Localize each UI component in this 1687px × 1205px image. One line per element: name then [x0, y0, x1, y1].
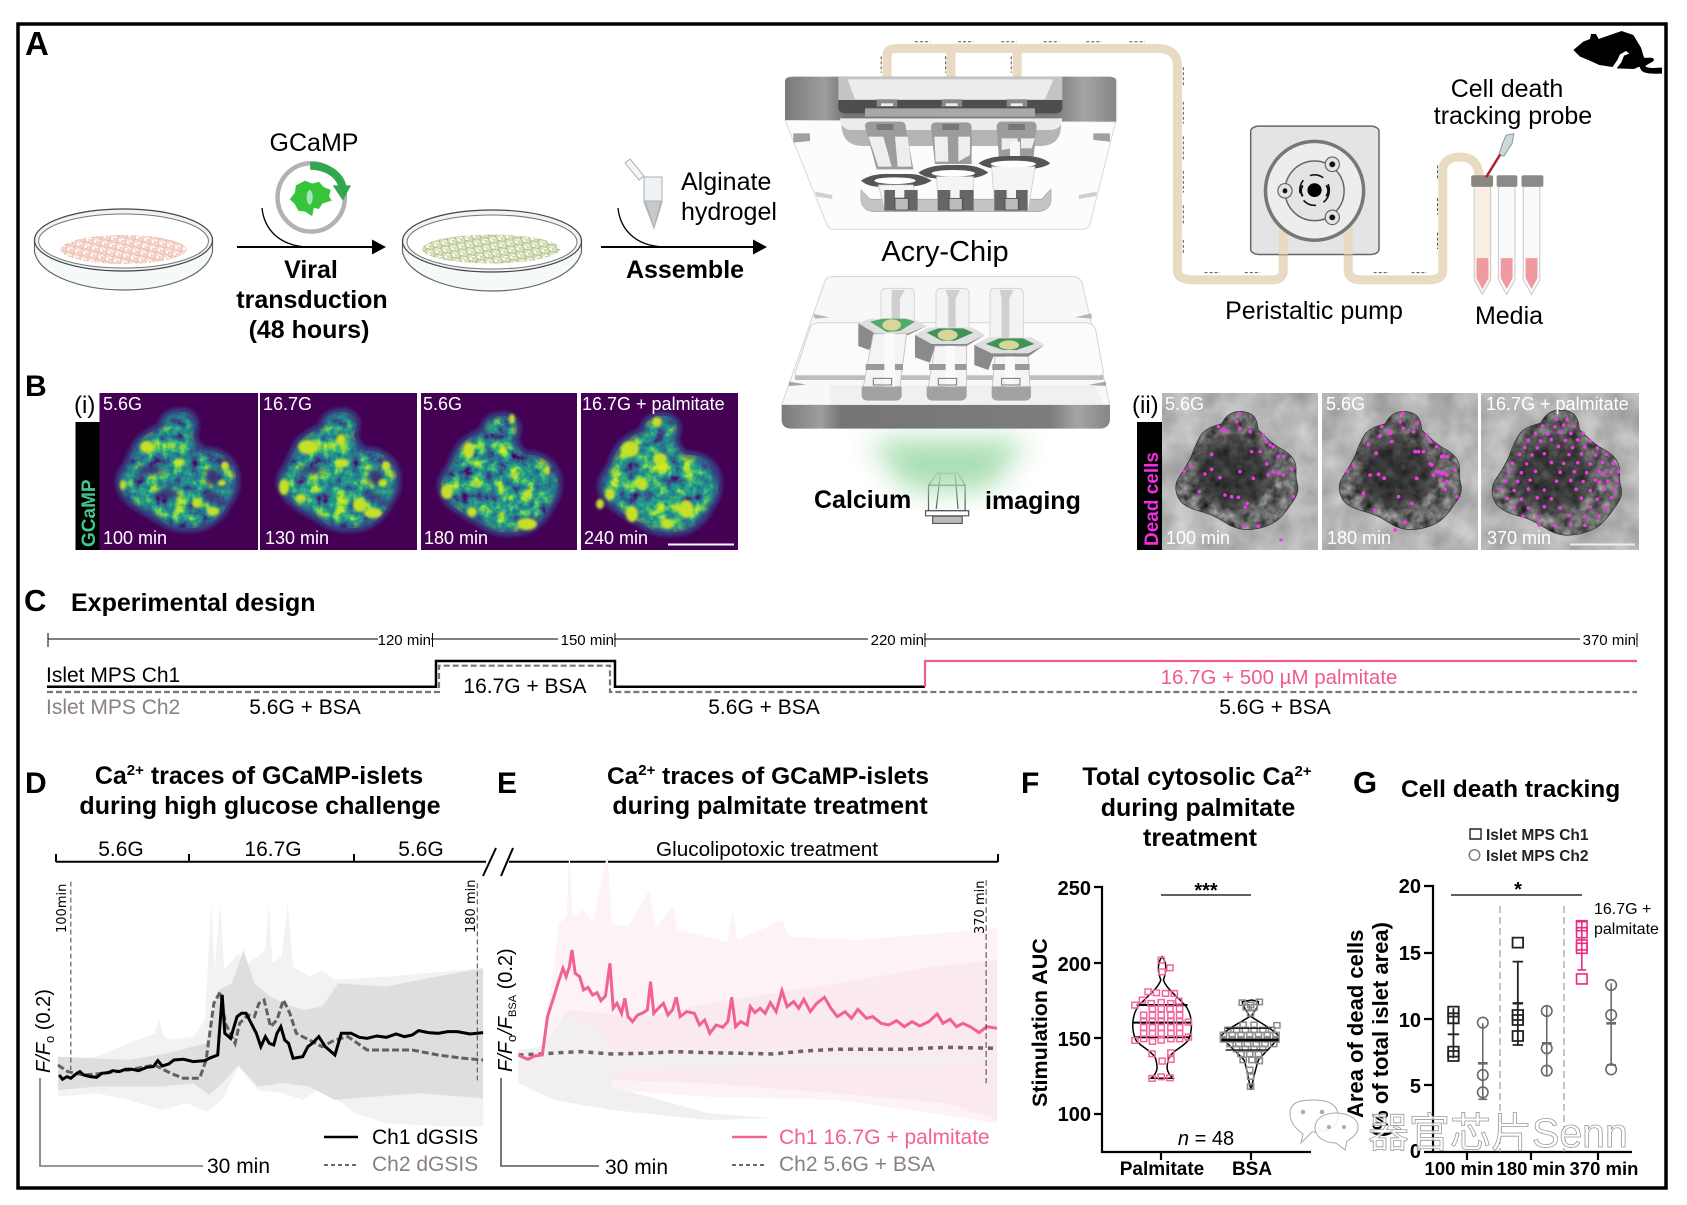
image: 5.6G 180 min: 5.6G — [1326, 394, 1365, 414]
panel: B(ii) dead cell images — [1132, 392, 1639, 550]
flow direction marks — [881, 42, 1438, 273]
panel: B(i) GCaMP images — [25, 370, 738, 550]
legend E: Ch2 5.6G + BSA — [779, 1153, 935, 1176]
label: Acry-Chip: Acry-Chip — [881, 236, 1009, 268]
label: (i): (i) — [74, 392, 95, 419]
chart D traces — [58, 882, 483, 1127]
axes: Palmitate — [1120, 1159, 1204, 1180]
step line: Ch1 — [47, 661, 925, 687]
annotation: 16.7G + palmitate: 16.7G + — [1594, 901, 1651, 918]
label: viral transduction: (48 hours) — [249, 316, 369, 344]
condition labels: 5.6G + BSA — [708, 696, 820, 719]
axes: 5 — [1410, 1076, 1421, 1098]
heading: panel F title: during palmitate — [1101, 794, 1295, 822]
heading: cell death tracking: Cell death tracking — [1401, 776, 1620, 803]
label strip: Dead cells — [1137, 422, 1163, 550]
timeline: 150 min — [561, 632, 614, 649]
diagram: bottom chip — [782, 277, 1110, 429]
timeline: 120 min — [378, 632, 431, 649]
axes: 200 — [1058, 954, 1091, 976]
timepoint labels: 100min — [55, 884, 70, 933]
y axis label line 2: (% of total islet area) — [1368, 922, 1393, 1137]
label: Islet MPS Ch2: Islet MPS Ch2 — [46, 696, 180, 719]
well: left — [858, 319, 927, 350]
heading: panel D title: during high glucose challenge — [79, 792, 441, 820]
panel letter E: E — [497, 767, 517, 800]
scale bar E — [501, 1078, 668, 1179]
heading: panel F title: 2+ — [1294, 763, 1312, 780]
violin: palmitate — [1132, 957, 1191, 1081]
y axis label: Stimulation AUC — [1028, 938, 1052, 1107]
axis label E: F/F — [495, 1040, 517, 1072]
chip top band — [785, 77, 1116, 122]
image: 5.6G 100 min — [100, 393, 258, 550]
heading: panel D title: traces of GCaMP-islets — [144, 762, 423, 790]
axis label D: F/F — [33, 1041, 55, 1073]
legend — [1469, 827, 1589, 865]
axes — [1399, 876, 1638, 1179]
scale bar E: 30 min — [605, 1156, 668, 1179]
axes: BSA — [1232, 1159, 1272, 1180]
image: 5.6G 180 min: 5.6G — [423, 394, 462, 414]
image: 5.6G 180 min — [1322, 393, 1478, 550]
sample size: n = 48 — [1178, 1128, 1234, 1150]
axis label E: BSA — [507, 994, 519, 1017]
panel: C experimental design — [24, 583, 1637, 719]
axes: 180 min — [1497, 1158, 1565, 1179]
scale bar D: 30 min — [207, 1155, 270, 1178]
panel: A workflow — [25, 25, 1662, 523]
condition labels: 16.7G + BSA — [463, 675, 587, 698]
heading: panel E title: 2+ — [638, 762, 656, 779]
label: Islet MPS Ch1: Islet MPS Ch1 — [46, 664, 180, 687]
label: imaging: imaging — [985, 487, 1081, 515]
condition labels: 5.6G + BSA — [249, 696, 361, 719]
violins — [1132, 957, 1280, 1090]
legend E — [732, 1126, 990, 1176]
image: 16.7G + palmitate 370 min — [1481, 393, 1639, 550]
condition bar: 5.6G — [398, 838, 444, 861]
step line: Ch1 palmitate — [925, 661, 1637, 687]
heading: panel D title: 2+ — [127, 762, 144, 779]
legend D: Ch2 dGSIS — [372, 1153, 478, 1176]
diagram: tubing, pump, media — [881, 42, 1543, 523]
axes: 15 — [1399, 943, 1421, 965]
axis label D: (0.2) — [33, 989, 55, 1036]
heading: panel F title: Total cytosolic Ca — [1082, 763, 1312, 791]
axes: 150 — [1058, 1029, 1091, 1051]
image: 16.7G + palmitate 240 min: 240 min — [584, 528, 648, 548]
axes: 100 min — [1425, 1158, 1493, 1179]
condition labels: 16.7G + 500 µM palmitate — [1161, 666, 1397, 689]
panel letter C: C — [24, 583, 46, 618]
panel letter D: D — [25, 767, 47, 800]
heading: panel E title: traces of GCaMP-islets — [655, 763, 929, 790]
icon: peristaltic pump — [1251, 126, 1379, 254]
axis label E: o — [504, 1035, 519, 1042]
icon: petri dish with transduced islets — [402, 210, 582, 291]
timeline: 220 min — [871, 632, 924, 649]
panel: D and E charts — [25, 762, 998, 1179]
label: (ii): (ii) — [1132, 392, 1159, 419]
channel top sections — [881, 288, 1023, 343]
significance — [1451, 879, 1582, 901]
image: 5.6G 100 min: 100 min — [103, 528, 167, 548]
image: 16.7G 130 min — [260, 393, 417, 550]
watermark — [1290, 1100, 1628, 1156]
well: middle — [915, 327, 985, 363]
image: 5.6G 100 min: 100 min — [1166, 528, 1230, 548]
tray — [793, 118, 1110, 212]
image: 5.6G 180 min: 180 min — [1327, 528, 1391, 548]
label: Peristaltic pump: Peristaltic pump — [1225, 297, 1403, 325]
icon: probe pipette — [1486, 134, 1514, 177]
panel letter G: G — [1353, 765, 1377, 800]
panel letter F: F — [1021, 767, 1039, 800]
label: GCaMP: GCaMP — [270, 129, 358, 157]
step line: Ch2 — [47, 666, 1637, 692]
chart E traces — [519, 847, 997, 1123]
image: 16.7G + palmitate 240 min: 16.7G + palmitate — [582, 394, 725, 414]
heading: experimental design: Experimental design — [71, 589, 316, 617]
significance — [1161, 880, 1251, 902]
timeline — [48, 632, 1637, 649]
axis label E: (0.2) — [495, 948, 517, 995]
image: 5.6G 100 min: 5.6G — [1165, 394, 1204, 414]
image: 16.7G + palmitate 370 min: 370 min — [1487, 528, 1551, 548]
scale bar D — [40, 1078, 270, 1178]
points: Ch2 gray — [1478, 980, 1616, 1099]
axes: 250 — [1058, 878, 1091, 900]
axes: 100 — [1058, 1104, 1091, 1126]
label: assemble: Assemble — [626, 256, 744, 284]
image: 5.6G 100 min: 5.6G — [103, 394, 142, 414]
diagram: top chip — [785, 77, 1116, 229]
channel: right — [978, 122, 1050, 211]
icon: GCaMP virus ring — [278, 163, 351, 232]
icon: media tubes — [1471, 175, 1543, 294]
arrow: assemble — [601, 208, 767, 254]
chip body — [785, 120, 1116, 229]
legend D — [324, 1126, 478, 1176]
label: Media: Media — [1475, 302, 1543, 330]
condition labels: 5.6G + BSA — [1219, 696, 1331, 719]
panel letter B: B — [25, 370, 47, 403]
image: 16.7G 130 min: 130 min — [265, 528, 329, 548]
heading: panel E title: Ca — [607, 762, 929, 790]
axes: 370 min — [1570, 1158, 1638, 1179]
label strip: Dead cells: Dead cells — [1142, 452, 1163, 546]
icon: microtube of alginate — [625, 159, 662, 228]
heading: panel F title: treatment — [1143, 824, 1258, 852]
channel: left — [861, 122, 932, 211]
axis label E: /F — [495, 1015, 517, 1037]
points: Ch1 black — [1448, 938, 1523, 1061]
icon: petri dish with islets — [34, 209, 212, 290]
watermark text: 器官芯片Senn — [1368, 1110, 1628, 1156]
label: Calcium: Calcium — [814, 486, 911, 514]
legend E: Ch1 16.7G + palmitate — [779, 1126, 990, 1149]
label strip: GCaMP: GCaMP — [79, 479, 100, 547]
axis label D: o — [42, 1036, 57, 1043]
annotation: 16.7G + palmitate: palmitate — [1594, 921, 1659, 938]
heading: panel D title: Ca — [95, 762, 423, 790]
tubing to chip — [887, 48, 1479, 280]
condition labels — [249, 666, 1397, 719]
image: 5.6G 100 min — [1162, 393, 1318, 550]
y axis label: Area of dead cells — [1343, 930, 1368, 1118]
panel: F violin plot — [1021, 763, 1312, 1180]
significance: * — [1514, 879, 1522, 901]
label: Cell death tracking probe: Cell death — [1451, 75, 1563, 103]
channel crossbars — [866, 333, 1030, 387]
image: 5.6G 180 min: 180 min — [424, 528, 488, 548]
channel: middle — [918, 122, 988, 211]
panel letter A: A — [25, 25, 49, 62]
heading: panel E title: during palmitate treatment — [612, 792, 928, 820]
image: 16.7G 130 min: 16.7G — [263, 394, 312, 414]
icon: mouse — [1573, 31, 1662, 74]
base band — [782, 405, 1110, 429]
label strip: GCaMP — [76, 422, 100, 550]
significance: *** — [1194, 880, 1218, 902]
points: palmitate pink — [1577, 921, 1587, 984]
step layer — [789, 313, 1106, 404]
icon: chat bubbles — [1290, 1100, 1358, 1150]
image: 16.7G + palmitate 240 min — [581, 393, 738, 550]
axes: 0 — [1410, 1141, 1421, 1163]
label: alginate hydrogel: Alginate — [681, 168, 771, 196]
axes — [1058, 878, 1311, 1180]
green imaging light — [868, 440, 1028, 490]
well: right — [974, 337, 1044, 370]
condition bar — [56, 838, 998, 876]
image: 16.7G + palmitate 370 min: 16.7G + palmitate — [1486, 394, 1629, 414]
label: Cell death tracking probe: tracking probe — [1434, 102, 1592, 130]
data points — [1448, 921, 1616, 1099]
panel: G cell death — [1343, 765, 1659, 1179]
label: alginate hydrogel: hydrogel — [681, 198, 777, 226]
channel ends — [862, 378, 1031, 401]
timeline: 370 min — [1583, 632, 1636, 649]
icon: objective lens — [926, 473, 969, 523]
plate surface — [782, 277, 1110, 405]
reservoir — [838, 77, 1062, 117]
condition bar: 16.7G — [244, 838, 302, 861]
image: 5.6G 180 min — [421, 393, 577, 550]
legend: Islet MPS Ch1 — [1486, 827, 1589, 844]
axes: 20 — [1399, 876, 1421, 898]
legend: Islet MPS Ch2 — [1486, 848, 1588, 865]
axes: 10 — [1399, 1010, 1421, 1032]
condition bar: Glucolipotoxic treatment — [656, 838, 878, 861]
label: viral transduction: transduction — [236, 286, 388, 314]
label: viral transduction: Viral — [284, 256, 338, 284]
timepoint labels: 370 min — [973, 881, 988, 934]
arrow: viral transduction — [237, 208, 386, 254]
timepoint labels — [55, 880, 988, 934]
legend D: Ch1 dGSIS — [372, 1126, 478, 1149]
channel lower sections — [863, 333, 1030, 387]
violin: BSA — [1220, 999, 1280, 1090]
condition bar: 5.6G — [98, 838, 144, 861]
timepoint labels: 180 min — [464, 880, 479, 933]
